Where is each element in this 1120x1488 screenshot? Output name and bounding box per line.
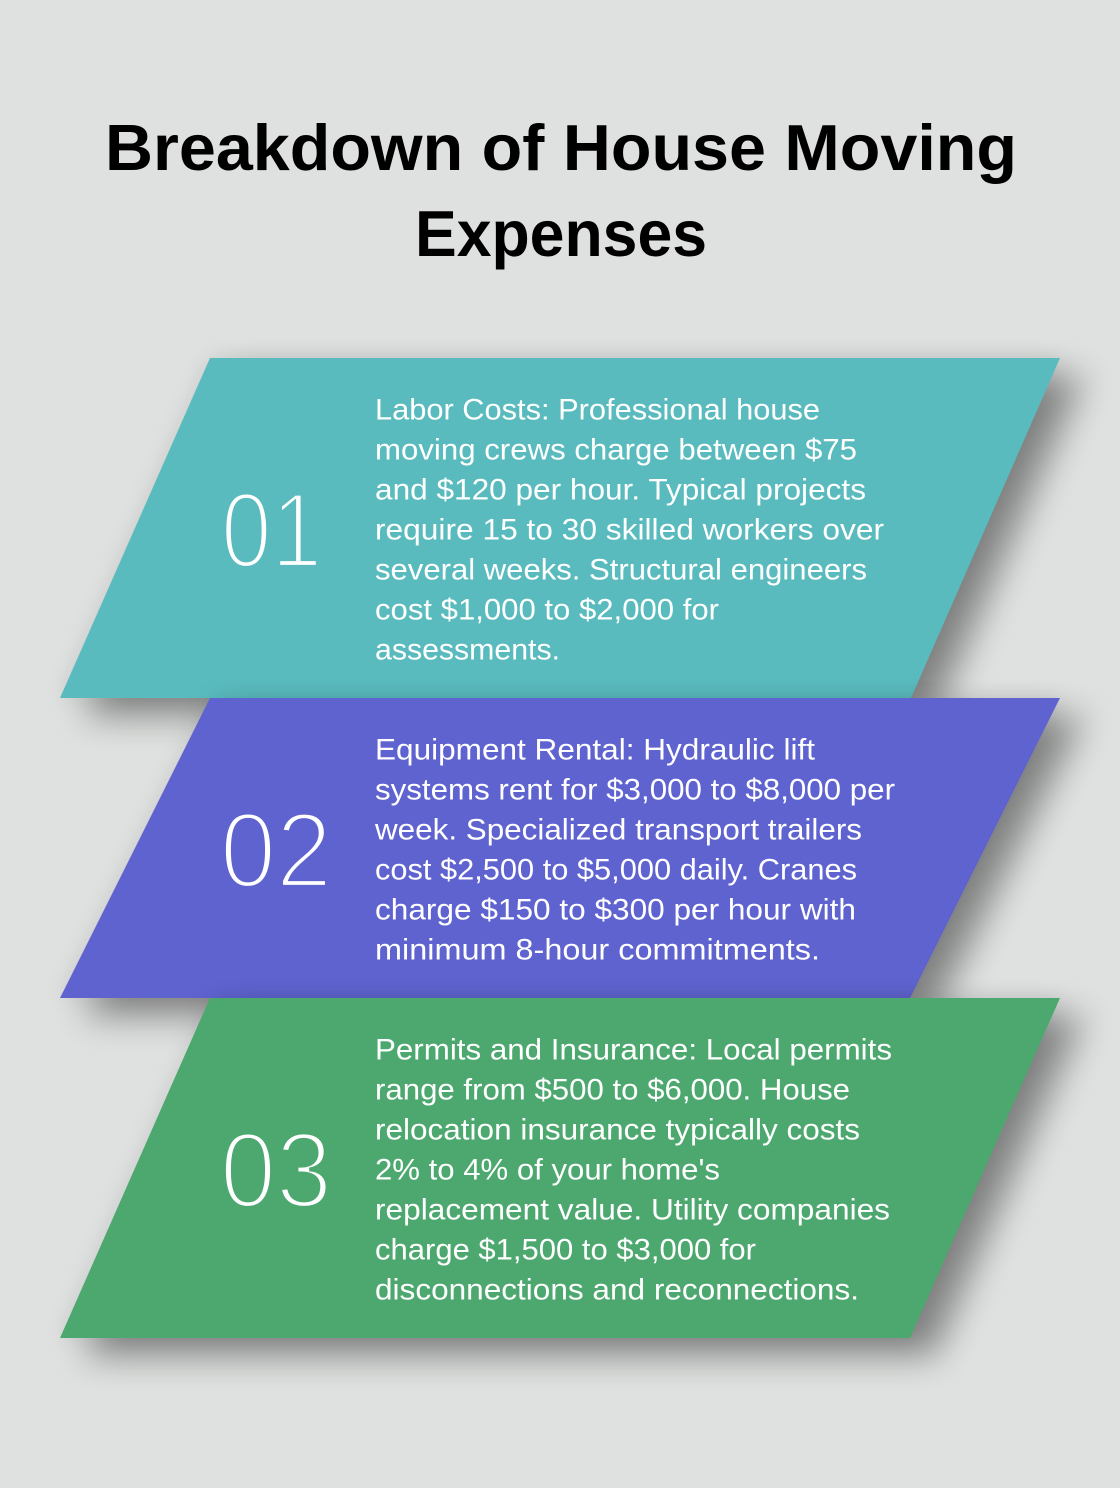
text: permits and insurance: disconnections and reconnections. bbox=[375, 1274, 859, 1306]
text: equipment rental: minimum 8-hour commitments. bbox=[375, 934, 820, 966]
title bbox=[105, 111, 1017, 270]
text: labor costs: moving crews charge between $75 bbox=[375, 434, 857, 466]
text: equipment rental: systems rent for $3,000 to $8,000 per bbox=[375, 774, 895, 806]
text: equipment rental: cost $2,500 to $5,000 daily. Cranes bbox=[375, 854, 857, 886]
text: equipment rental: charge $150 to $300 per hour with bbox=[375, 894, 856, 926]
text: labor costs bbox=[375, 394, 884, 666]
text: labor costs: require 15 to 30 skilled workers over bbox=[375, 514, 884, 546]
text: labor costs: cost $1,000 to $2,000 for bbox=[375, 594, 719, 626]
number 01: 01 bbox=[221, 470, 322, 590]
text: labor costs: several weeks. Structural engineers bbox=[375, 554, 867, 586]
panel: 01 labor costs bbox=[60, 358, 1084, 716]
text: equipment rental: week. Specialized transport trailers bbox=[374, 814, 862, 846]
text: permits and insurance: Permits and Insurance: Local permits bbox=[375, 1034, 892, 1066]
title: Breakdown of House Moving bbox=[105, 111, 1017, 184]
text: permits and insurance: relocation insurance typically costs bbox=[375, 1114, 860, 1146]
text: permits and insurance bbox=[375, 1034, 892, 1306]
text: labor costs: assessments. bbox=[375, 634, 560, 666]
text: permits and insurance: 2% to 4% of your home's bbox=[375, 1154, 720, 1186]
text: permits and insurance: charge $1,500 to $3,000 for bbox=[375, 1234, 756, 1266]
text: equipment rental: Equipment Rental: Hydraulic lift bbox=[375, 734, 815, 766]
title: Expenses bbox=[415, 197, 707, 270]
number 03: 03 bbox=[220, 1110, 332, 1230]
panel: 02 equipment rental bbox=[60, 698, 1084, 1016]
text: labor costs: Labor Costs: Professional house bbox=[375, 394, 820, 426]
panel: 03 permits and insurance bbox=[60, 998, 1084, 1356]
text: labor costs: and $120 per hour. Typical projects bbox=[375, 474, 866, 506]
text: permits and insurance: range from $500 to $6,000. House bbox=[375, 1074, 850, 1106]
text: permits and insurance: replacement value. Utility companies bbox=[375, 1194, 890, 1226]
number 02: 02 bbox=[220, 790, 332, 910]
text: equipment rental bbox=[374, 734, 895, 966]
